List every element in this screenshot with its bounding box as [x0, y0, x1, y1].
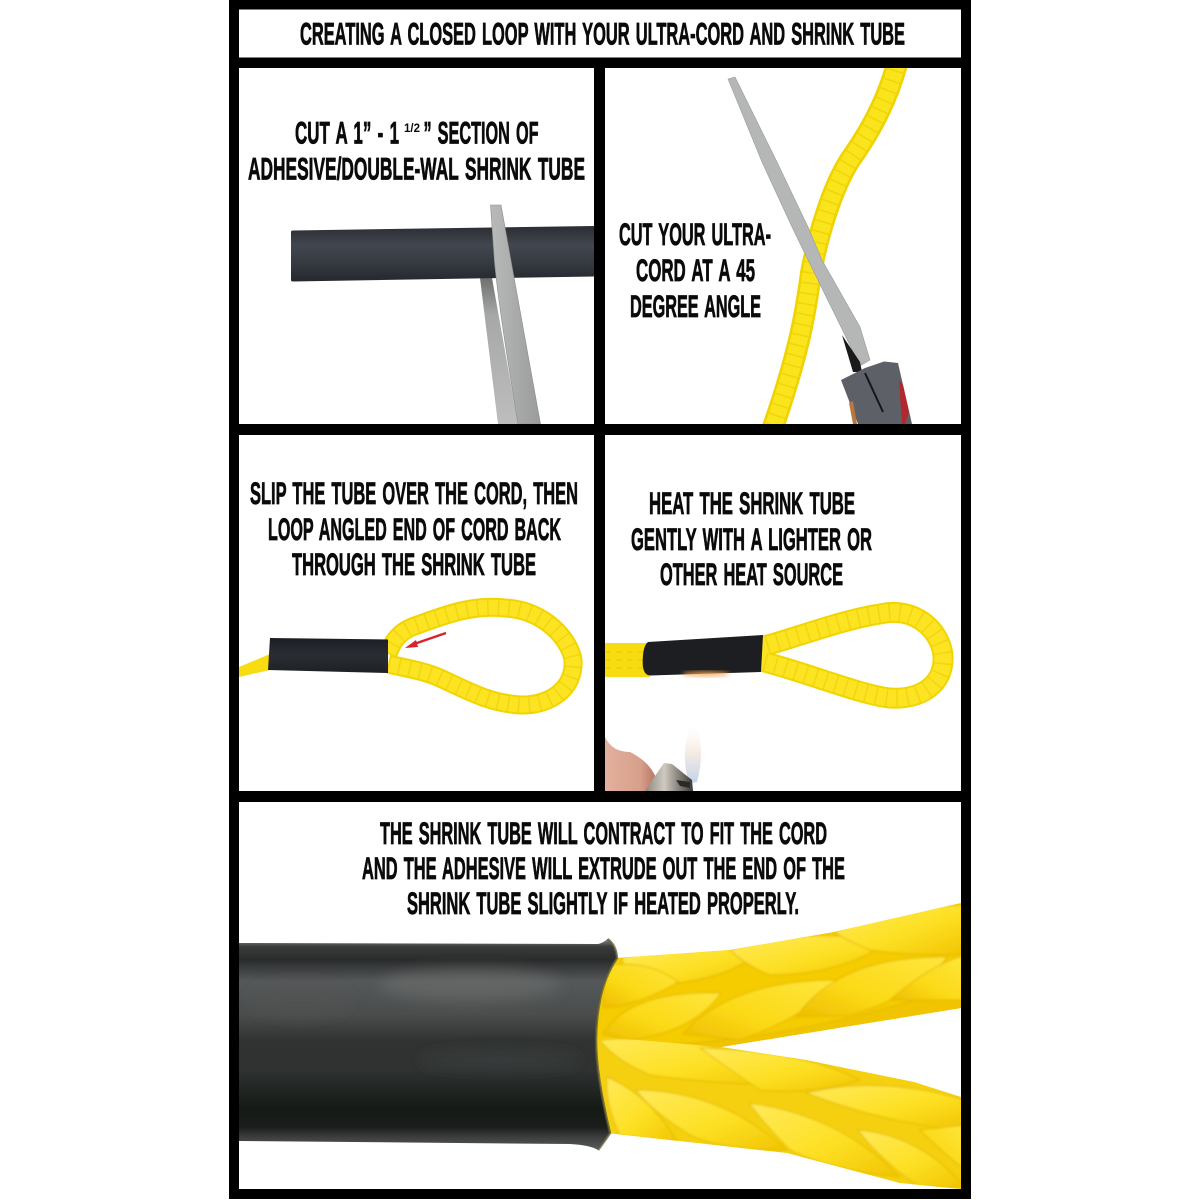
instruction: slip tube and loop: LOOP ANGLED END OF CORD BACK — [268, 511, 561, 547]
photo: close-up of finished tube and cords — [239, 900, 965, 1195]
finger — [605, 737, 656, 791]
photo: cord loop with tube — [239, 607, 573, 705]
instruction: cut tube section: ” SECTION OF — [424, 114, 538, 150]
tube highlights — [387, 964, 552, 1064]
tube end lip — [596, 939, 617, 1150]
instruction: result description: SHRINK TUBE SLIGHTLY IF HEATED PROPERLY. — [407, 885, 799, 921]
lighter flame — [684, 737, 701, 783]
instruction: heat tube — [631, 485, 872, 592]
instruction: heat tube: GENTLY WITH A LIGHTER OR — [631, 521, 872, 557]
instruction: heat tube: HEAT THE SHRINK TUBE — [649, 485, 855, 521]
panel: heat the tube — [605, 435, 961, 791]
instruction: slip tube and loop: SLIP THE TUBE OVER THE CORD, THEN — [250, 475, 578, 511]
panel: cut the cord — [605, 60, 961, 430]
instruction: cut cord at angle — [619, 216, 771, 324]
panel: finished shrink tube — [239, 802, 965, 1195]
instruction: cut tube section: ADHESIVE/DOUBLE-WAL SHRINK TUBE — [248, 150, 585, 186]
upper cord — [590, 900, 965, 1050]
panel: cut the shrink tube — [239, 68, 594, 424]
photo: scissors cutting tube — [291, 205, 594, 424]
instruction: cut tube section: 1/2 — [404, 121, 420, 135]
instruction: slip tube and loop: THROUGH THE SHRINK TUBE — [292, 546, 536, 582]
instruction: cut tube section — [248, 114, 585, 186]
photo: heated cord loop — [605, 612, 943, 791]
panel: loop cord through tube — [239, 435, 594, 791]
lighter — [645, 763, 693, 791]
flame glow on tube — [682, 672, 730, 676]
instruction: heat tube: OTHER HEAT SOURCE — [660, 556, 843, 592]
black frame — [229, 0, 971, 1199]
instruction: cut tube section: CUT A 1” - 1 — [295, 114, 399, 150]
photo: scissors cutting yellow cord — [728, 60, 912, 430]
lower cord — [590, 1035, 965, 1195]
shrink tube — [239, 939, 617, 1150]
arrow: red direction arrow — [405, 633, 446, 648]
instruction: cut cord at angle: DEGREE ANGLE — [630, 288, 761, 324]
scissor handle — [841, 362, 912, 424]
instruction: cut cord at angle: CUT YOUR ULTRA- — [619, 216, 771, 252]
instruction: slip tube and loop — [250, 475, 578, 582]
instruction: result description — [362, 815, 845, 921]
instruction: cut cord at angle: CORD AT A 45 — [636, 252, 755, 288]
title banner — [239, 10, 961, 58]
